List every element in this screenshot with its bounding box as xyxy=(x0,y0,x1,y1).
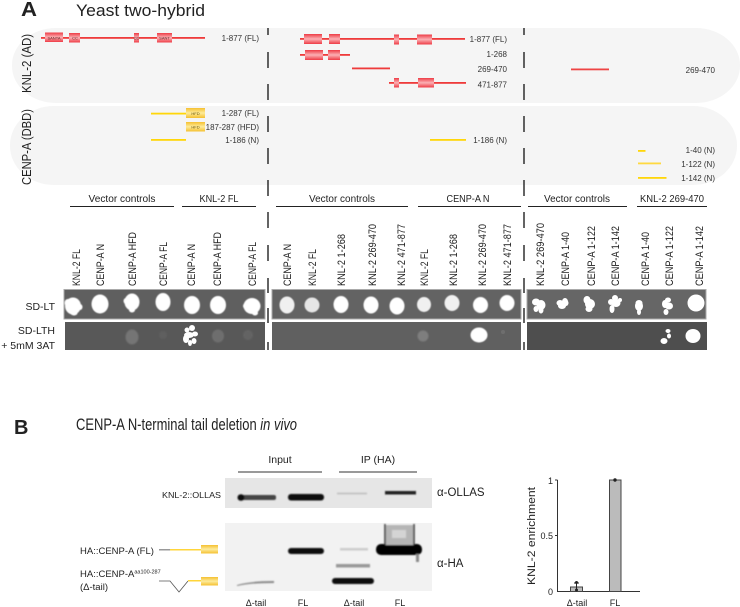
plate: SD-LTH middle xyxy=(272,322,521,350)
bar: delta tail xyxy=(570,587,582,592)
construct schematic: HA::CENP-A (FL): HA::CENP-A (FL) xyxy=(80,546,154,557)
constructs: middle column KNL-2: 471-877 xyxy=(478,80,508,90)
strain labels: left: CENP-A N xyxy=(186,244,198,286)
strain labels: left: CENP-A HFD xyxy=(127,232,139,286)
strain labels: right: CENP-A 1-40 xyxy=(640,232,652,286)
constructs: left column KNL-2 FL: CC xyxy=(72,36,78,40)
constructs: right column CENP-A: 1-142 (N) xyxy=(681,174,715,183)
heading: CENP-A N-terminal tail deletion in vivo: CENP-A N-terminal tail deletion in vivo xyxy=(76,415,297,434)
constructs: middle column CENP-A N: 1-186 (N) xyxy=(473,136,507,145)
strain labels: middle: KNL-2 269-470 xyxy=(367,224,379,286)
group headers with rules xyxy=(70,193,707,206)
strain labels: right: CENP-A 1-40 xyxy=(560,232,572,286)
constructs: right column CENP-A xyxy=(638,146,715,183)
strain labels: left xyxy=(71,232,259,286)
bar: FL xyxy=(610,480,621,592)
strain labels: left: CENP-A HFD xyxy=(212,232,224,286)
tick labels: 0.5 xyxy=(540,531,553,541)
constructs: left column CENP-A xyxy=(151,108,259,145)
strain labels: middle: KNL-2 1-268 xyxy=(448,234,460,286)
panel: CENP-A DBD background xyxy=(10,106,737,185)
group headers with rules: KNL-2 FL xyxy=(200,193,239,205)
constructs: left column CENP-A: HFD xyxy=(191,111,200,116)
western blot: HA xyxy=(225,523,432,591)
panel: KNL-2 AD background xyxy=(12,28,740,103)
strain labels: left: CENP-A FL xyxy=(158,242,170,286)
blot antibody labels: α-HA xyxy=(437,558,464,570)
constructs: left column CENP-A: 1-287 (FL) xyxy=(222,109,259,118)
blot antibody labels: α-OLLAS xyxy=(437,487,485,499)
construct schematic: HA::CENP-A delta tail: aa100-287 xyxy=(134,570,161,576)
strain labels: middle: KNL-2 471-877 xyxy=(502,224,514,286)
western blot: OLLAS xyxy=(225,478,432,508)
group headers with rules: Vector controls xyxy=(544,193,610,205)
constructs: middle column KNL-2: 1-268 xyxy=(487,50,508,59)
group headers with rules: CENP-A N xyxy=(446,193,490,205)
blot headers: IP (HA) xyxy=(361,454,395,466)
plate: SD-LTH right xyxy=(527,322,707,350)
strain labels: right: CENP-A 1-142 xyxy=(610,226,622,286)
axes xyxy=(555,480,640,592)
construct schematic: HA::CENP-A delta tail xyxy=(80,569,218,593)
constructs: right column KNL-2 269-470: 269-470 xyxy=(686,66,716,75)
strain labels: right xyxy=(535,223,706,286)
strain labels: left: CENP-A FL xyxy=(247,242,259,286)
bar chart: KNL-2 enrichment xyxy=(526,476,640,607)
constructs: right column CENP-A: 1-40 (N) xyxy=(686,146,715,155)
heading: Yeast two-hybrid: Yeast two-hybrid xyxy=(76,1,205,20)
medium labels: + 5mM 3AT xyxy=(1,340,56,352)
group headers with rules: KNL-2 269-470 xyxy=(640,193,704,205)
plate: SD-LT right xyxy=(527,290,706,319)
strain labels: middle xyxy=(282,224,514,286)
label: KNL-2 (AD): KNL-2 (AD) xyxy=(19,34,34,93)
strain labels: middle: CENP-A N xyxy=(282,244,294,286)
medium labels: SD-LTH xyxy=(18,325,55,337)
constructs: left column CENP-A: 1-186 (N) xyxy=(225,136,259,145)
constructs: right column CENP-A: 1-122 (N) xyxy=(681,160,715,169)
constructs: left column CENP-A: HFD xyxy=(191,124,200,130)
error bars and points xyxy=(574,478,617,592)
construct schematic: HA::CENP-A delta tail: HA::CENP-A xyxy=(80,569,134,580)
label: KNL-2::OLLAS: KNL-2::OLLAS xyxy=(162,490,221,500)
strain labels: left: CENP-A N xyxy=(95,244,107,286)
constructs: left column KNL-2 FL xyxy=(41,32,259,43)
label: CENP-A (DBD): CENP-A (DBD) xyxy=(19,109,34,185)
plate: SD-LT middle xyxy=(272,290,521,319)
axis title: KNL-2 enrichment xyxy=(526,487,538,585)
strain labels: middle: KNL-2 FL xyxy=(307,249,319,286)
strain labels: middle: KNL-2 269-470 xyxy=(477,224,489,286)
constructs: middle column CENP-A N xyxy=(430,136,507,145)
constructs: left column KNL-2 FL: CD xyxy=(134,36,139,40)
tick labels: 1 xyxy=(548,476,553,486)
strain labels: middle: KNL-2 1-268 xyxy=(336,234,348,286)
strain labels: middle: KNL-2 471-877 xyxy=(396,224,408,286)
strain labels: right: CENP-A 1-122 xyxy=(664,226,676,286)
constructs: middle column KNL-2: 1-877 (FL) xyxy=(470,35,507,44)
constructs: left column KNL-2 FL: SANTA xyxy=(47,36,61,40)
panel label B: B xyxy=(14,417,28,439)
blot antibody labels xyxy=(437,487,485,570)
construct schematic: HA::CENP-A delta tail: (Δ-tail) xyxy=(80,582,108,593)
blot headers: Input xyxy=(268,454,292,466)
plate: SD-LTH left xyxy=(65,322,265,350)
blot headers xyxy=(238,454,417,472)
medium labels: SD-LT xyxy=(25,301,56,313)
strain labels: right: CENP-A 1-142 xyxy=(694,226,706,286)
plate: SD-LT left xyxy=(64,290,265,319)
tick labels xyxy=(540,476,620,607)
group headers with rules: Vector controls xyxy=(309,193,375,205)
constructs: left column CENP-A: 187-287 (HFD) xyxy=(206,123,259,132)
group headers with rules: Vector controls xyxy=(88,193,156,205)
construct schematic: HA::CENP-A (FL) xyxy=(80,545,218,557)
strain labels: right: KNL-2 269-470 xyxy=(535,223,547,286)
medium labels xyxy=(1,301,56,352)
tick labels: 0 xyxy=(548,587,553,597)
constructs: middle column KNL-2: 269-470 xyxy=(478,65,508,74)
blot lane labels xyxy=(246,598,405,607)
constructs: left column KNL-2 FL: 1-877 (FL) xyxy=(222,34,259,43)
constructs: middle column KNL-2 xyxy=(300,34,508,90)
strain labels: left: KNL-2 FL xyxy=(71,249,83,286)
strain labels: middle: KNL-2 FL xyxy=(419,249,431,286)
strain labels: right: CENP-A 1-122 xyxy=(586,226,598,286)
constructs: left column KNL-2 FL: SANT xyxy=(159,36,170,40)
